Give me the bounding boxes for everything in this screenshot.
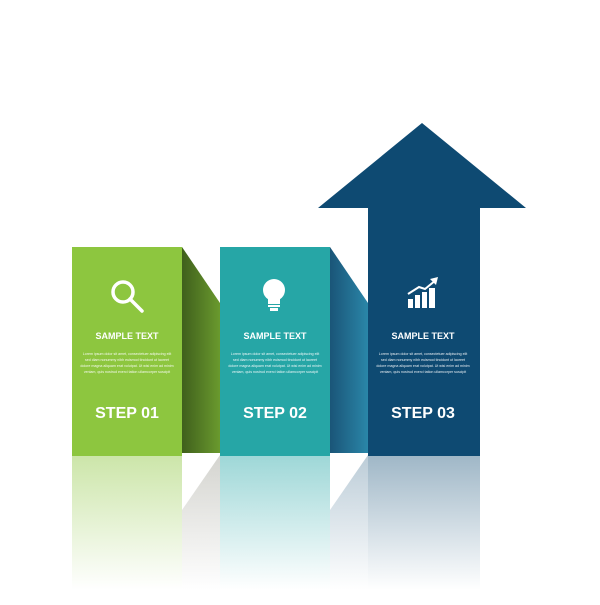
icon: growth chart — [408, 277, 438, 308]
panel: step 01: sed diam nonummy nibh euismod tincidunt ut laoreet — [85, 358, 169, 362]
panel: step 03 arrow: SAMPLE TEXT — [391, 331, 455, 341]
panel: step 03 arrow — [318, 123, 526, 453]
panel: step 03 arrow: Lorem ipsum dolor sit amet, consectetuer adipiscing elit — [379, 352, 467, 356]
panel: step 03 arrow: veniam, quis nostrud exerci tation ullamcorper suscipit — [380, 370, 466, 374]
panel: step 02: dolore magna aliquam erat volutpat. Ut wisi enim ad minim — [228, 364, 322, 368]
fold: teal to navy — [330, 247, 368, 453]
fold: green to teal — [182, 247, 220, 453]
panel: step 03 arrow: STEP 03 — [391, 405, 455, 422]
icon: magnifier — [113, 282, 142, 311]
panel: step 01: veniam, quis nostrud exerci tation ullamcorper suscipit — [84, 370, 170, 374]
panel: step 03 arrow: dolore magna aliquam erat volutpat. Ut wisi enim ad minim — [376, 364, 470, 368]
icon: light bulb — [263, 279, 285, 311]
panel: step 01 — [72, 247, 182, 453]
panel: step 02 — [220, 247, 330, 453]
panel: step 02: STEP 02 — [243, 405, 307, 422]
panel: step 02: SAMPLE TEXT — [243, 331, 307, 341]
panel: step 01: STEP 01 — [95, 405, 159, 422]
panel: step 02: Lorem ipsum dolor sit amet, consectetuer adipiscing elit — [231, 352, 319, 356]
panel: step 02: veniam, quis nostrud exerci tation ullamcorper suscipit — [232, 370, 318, 374]
panel: step 02: sed diam nonummy nibh euismod tincidunt ut laoreet — [233, 358, 317, 362]
panel: step 03 arrow: sed diam nonummy nibh euismod tincidunt ut laoreet — [381, 358, 465, 362]
panel: step 01: dolore magna aliquam erat volutpat. Ut wisi enim ad minim — [80, 364, 174, 368]
panel: step 01: SAMPLE TEXT — [95, 331, 159, 341]
reflection — [72, 453, 480, 590]
panel: step 01: Lorem ipsum dolor sit amet, consectetuer adipiscing elit — [83, 352, 171, 356]
